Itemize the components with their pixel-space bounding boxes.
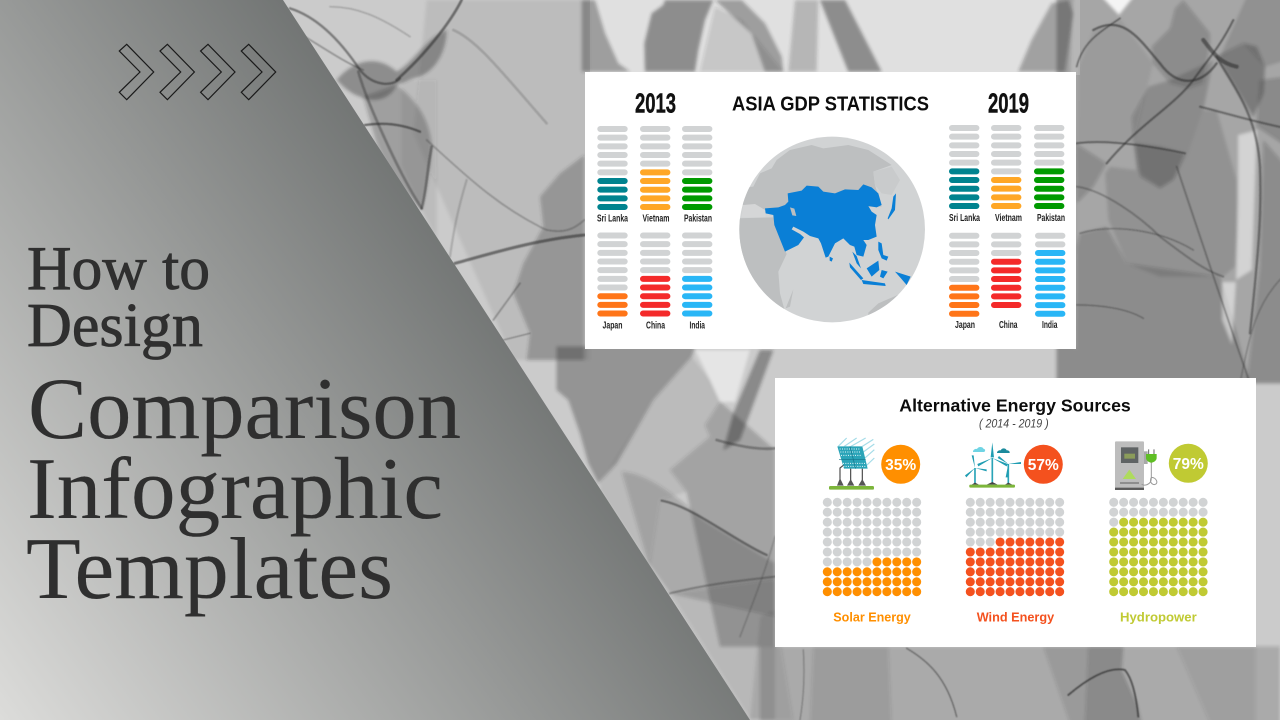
map: Caspian Sea notch [790,207,796,216]
title: How to Design Comparison Infographic Templates: Design [27,292,203,360]
badge: 57% [1024,445,1063,484]
title: How to Design Comparison Infographic Templates [26,235,461,618]
labels: 2013 countries: Japan [602,320,622,332]
labels: 2019 countries: China [999,320,1018,331]
waffle chart: hydropower 79 percent [1114,502,1203,592]
labels: 2019 countries: Pakistan [1037,213,1065,224]
icon: solar panel [829,438,874,490]
badge: 35% [881,445,920,484]
label: Solar Energy: Solar Energy [833,610,912,625]
badge: 57%: 57% [1028,457,1059,474]
labels: 2013 countries: Pakistan [684,214,712,224]
heading: 2013: 2013 [635,88,676,118]
title: How to Design Comparison Infographic Templates: How to [27,235,210,303]
label: Wind Energy: Wind Energy [977,610,1055,625]
labels: 2013 countries: India [690,320,705,332]
badge: 79% [1169,444,1208,483]
map: Asia [765,184,882,258]
icon: four outlined chevrons [119,44,276,100]
title: How to Design Comparison Infographic Templates: Infographic [27,441,443,538]
labels: 2019 countries [949,213,1065,331]
labels: 2013 countries: Sri Lanka [597,214,628,224]
labels: 2013 countries [597,214,712,332]
panel: alternative energy sources [775,378,1256,647]
icon: wind turbines [965,442,1021,488]
labels: 2019 countries: Vietnam [995,213,1022,224]
labels: 2019 countries: India [1042,320,1058,331]
waffle chart: solar 35 percent [827,502,917,592]
labels: 2019 countries: Japan [955,320,975,331]
labels: 2013 countries: China [646,320,665,332]
title: How to Design Comparison Infographic Templates: Templates [26,521,393,618]
chart: globe with Asia highlighted [739,136,925,322]
chart: 2013 bars [600,129,709,314]
map: Asian islands [830,193,911,286]
heading: 2019: 2019 [988,88,1029,118]
waffle chart: wind 57 percent [970,502,1060,592]
labels: 2019 countries: Sri Lanka [949,213,980,224]
subheading: date range: ( 2014 - 2019 ) [979,418,1049,430]
left gradient diagonal panel [0,0,750,720]
chart: 2019 bars [952,128,1062,314]
title: How to Design Comparison Infographic Templates: Comparison [28,361,461,458]
panel: Asia GDP statistics [585,72,1076,349]
icon: electric charging station [1115,441,1157,490]
labels: 2013 countries: Vietnam [642,214,670,224]
label: Hydropower: Hydropower [1120,610,1197,625]
badge: 79%: 79% [1173,456,1204,473]
heading: Asia GDP statistics: ASIA GDP STATISTICS [732,93,929,115]
heading: Alternative Energy Sources: Alternative Energy Sources [899,396,1131,416]
badge: 35%: 35% [885,457,916,474]
